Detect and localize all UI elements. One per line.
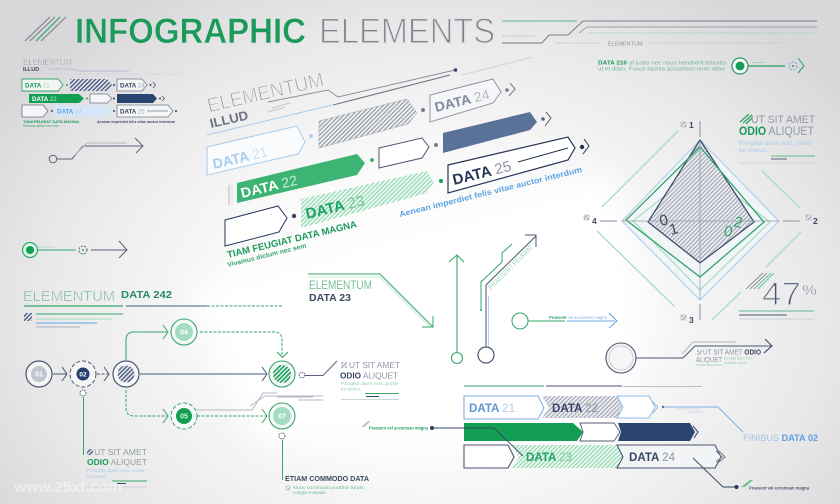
callout: praesent left: Praesent vel accumsan magna	[369, 426, 428, 430]
flow heading: ELEMENTUM	[23, 288, 115, 305]
node 01	[26, 361, 67, 387]
row 3: DATA 25	[120, 108, 145, 116]
arrow: circuit upper left	[49, 138, 143, 163]
small heading	[22, 58, 183, 74]
callout: data 216	[598, 58, 804, 74]
callout: finibus data 02: FINIBUS DATA 02	[743, 433, 818, 444]
radar series 02	[626, 147, 764, 277]
watermark: www.25xt.com	[13, 479, 122, 496]
row 2: DATA 22	[32, 96, 57, 103]
callout: radar text: tor metus.	[739, 147, 768, 154]
callout: ring text	[606, 339, 772, 373]
series 01 label	[658, 211, 680, 239]
data 24 box	[430, 79, 515, 122]
row 3: DATA 23	[57, 108, 82, 116]
radar chart	[584, 120, 818, 325]
callout: etiam commodo: ETIAM COMMODO DATA	[285, 474, 370, 483]
title: ELEMENTS	[319, 12, 495, 51]
stat: 47 percent: %	[802, 282, 817, 299]
callout: ring text: UT SIT AMET ODIO	[703, 350, 762, 356]
callout: etiam commodo	[279, 433, 370, 495]
node 07	[269, 403, 295, 429]
callout: data 216: ut et diam. Fusce lacinia accumsan nunc vitae	[598, 66, 725, 72]
title: INFOGRAPHIC	[75, 12, 306, 51]
series 02 label	[722, 213, 744, 241]
branch down to node 05: 05	[180, 414, 188, 420]
arrow: vertical green	[449, 255, 464, 364]
series 01 label: 0	[658, 211, 670, 230]
branch up to node 04	[126, 319, 288, 360]
row: data 23 and 24: DATA 24	[629, 450, 675, 464]
angled captions: Aenean imperdiet felis vitae auctor interdum	[398, 165, 583, 219]
node 01: 01	[35, 372, 43, 378]
axis labels: 2	[813, 216, 818, 226]
target node	[269, 361, 295, 387]
outline box	[379, 138, 438, 168]
arrow: diagonal navy with label: PRAESENT FEUGIAT	[487, 244, 535, 291]
data 21 box: DATA 21	[211, 143, 269, 172]
callout: radar text	[739, 114, 815, 163]
flow heading	[23, 288, 282, 327]
callout: radar text: Fringilla diam non, portti-	[739, 140, 813, 147]
row: data 21 and 22: DATA 21	[469, 401, 515, 415]
node 02	[70, 361, 109, 387]
callout: ring text: ALIQUET	[696, 355, 722, 364]
row 1	[22, 79, 156, 91]
stat: 47 percent	[739, 273, 817, 319]
small captions	[23, 119, 175, 128]
small captions: TIAM FEUGIAT DATA MAGNA	[23, 119, 79, 124]
arrow: elementum data 23	[308, 274, 433, 327]
hatched box	[319, 99, 425, 148]
arrow: elementum data 23: DATA 23	[309, 292, 351, 304]
angled captions: TIAM FEUGIAT DATA MAGNA	[226, 219, 358, 261]
data 24 box: DATA 24	[433, 87, 492, 115]
data 23 box: DATA 23	[304, 192, 366, 223]
radar series 01	[648, 140, 754, 263]
callout: target node text	[299, 361, 400, 400]
callout: data 216: DATA 216 at justo nec risus hendrerit lobortis	[598, 60, 726, 66]
callout: radar text: ODIO ALIQUET	[739, 124, 815, 138]
arrow: elementum data 23: ELEMENTUM	[309, 280, 372, 292]
callout: ring text: porttitor metus.	[724, 361, 747, 365]
row 1: DATA 24	[120, 82, 145, 90]
row: filled bars	[464, 423, 698, 441]
callout: below node 02: Fringilla diam non, portti-	[87, 468, 147, 473]
arrow: diagonal navy with label	[478, 235, 536, 363]
callout: below node 02: tor metus.	[87, 474, 107, 479]
node 07: 07	[278, 414, 286, 420]
callout: finibus data 02	[662, 406, 818, 444]
small heading: ILLUD	[23, 67, 39, 73]
series 02 label: 0	[722, 222, 734, 241]
data 25 box: DATA 25	[451, 158, 513, 189]
callout: praesent left	[361, 421, 523, 456]
title	[25, 12, 495, 51]
panel: small data chevrons	[22, 58, 183, 128]
callout: below node 02: ODIO ALIQUET	[87, 457, 147, 467]
branch up to node 04: 04	[180, 330, 188, 336]
row 2	[29, 94, 164, 103]
data 22 box	[229, 154, 374, 205]
axis labels	[584, 120, 818, 325]
arrow: target line left	[22, 241, 127, 258]
row: data 23 and 24: DATA 23	[526, 450, 572, 464]
axis labels: 4	[592, 216, 597, 226]
chart: horizontal chevron rows	[464, 386, 725, 468]
callout: praesent right: Praesent vel accumsan magna	[749, 486, 809, 490]
node 02: 02	[79, 372, 87, 378]
callout: below node 02	[80, 390, 147, 487]
small heading: ELEMENTUM	[23, 58, 72, 67]
callout: praesent right	[693, 458, 809, 490]
series 02 label: 2	[732, 213, 744, 232]
flow diagram	[26, 319, 323, 429]
callout: target node text: Fringilla diam non, portti-	[341, 381, 400, 386]
small captions: Aenean imperdiet felis vitae auctor interdum	[97, 119, 175, 124]
row: data 21 and 22: DATA 22	[552, 401, 598, 415]
panel: angled data chevrons	[205, 57, 589, 269]
arrow: horizontal praesent	[512, 313, 617, 329]
callout: ring text: Fringilla diam non,	[724, 356, 753, 360]
node 03	[113, 361, 267, 387]
header rule lines	[502, 21, 817, 48]
callout: etiam commodo: congue molestie	[293, 490, 326, 495]
series 01 label: 1	[668, 220, 680, 239]
row 1: DATA 21	[25, 82, 50, 90]
stat: 47 percent: 47	[762, 276, 801, 312]
row 3	[22, 105, 177, 117]
arrow: horizontal praesent: Praesent vel accumsan magna	[549, 315, 608, 320]
callout: etiam commodo: Nunc commodo porttitor turpis,	[293, 485, 365, 490]
callout: radar text: UT SIT AMET	[751, 114, 815, 126]
small captions: Vivamus dictum nec sem	[23, 124, 59, 128]
angled heading: ILLUD	[208, 108, 250, 131]
data 21 box	[207, 126, 313, 175]
axis labels: 3	[689, 315, 694, 325]
callout: target node text: tor metus.	[341, 386, 361, 392]
callout: below node 02: UT SIT AMET	[94, 448, 147, 457]
flow heading: DATA 242	[121, 289, 172, 301]
dark outline box	[225, 206, 296, 246]
data 22 box: DATA 22	[239, 172, 299, 201]
angled heading	[205, 57, 533, 135]
branch down to node 05	[126, 390, 267, 429]
callout: target node text: UT SIT AMET	[349, 361, 400, 370]
angled heading: ELEMENTUM	[205, 69, 326, 117]
angled captions	[226, 165, 583, 269]
row: data 23 and 24	[464, 445, 725, 468]
callout: target node text: ODIO ALIQUET	[340, 370, 398, 380]
row: data 21 and 22	[464, 396, 658, 419]
radar outer guides	[597, 121, 801, 320]
filled blue box	[443, 112, 551, 153]
data 23 box	[301, 171, 443, 228]
header rule lines: ELEMENTUM	[608, 42, 643, 48]
angled captions: Vivamus dictum nec sem	[227, 242, 307, 269]
data 25 box	[448, 137, 589, 193]
axis labels: 1	[689, 120, 694, 130]
